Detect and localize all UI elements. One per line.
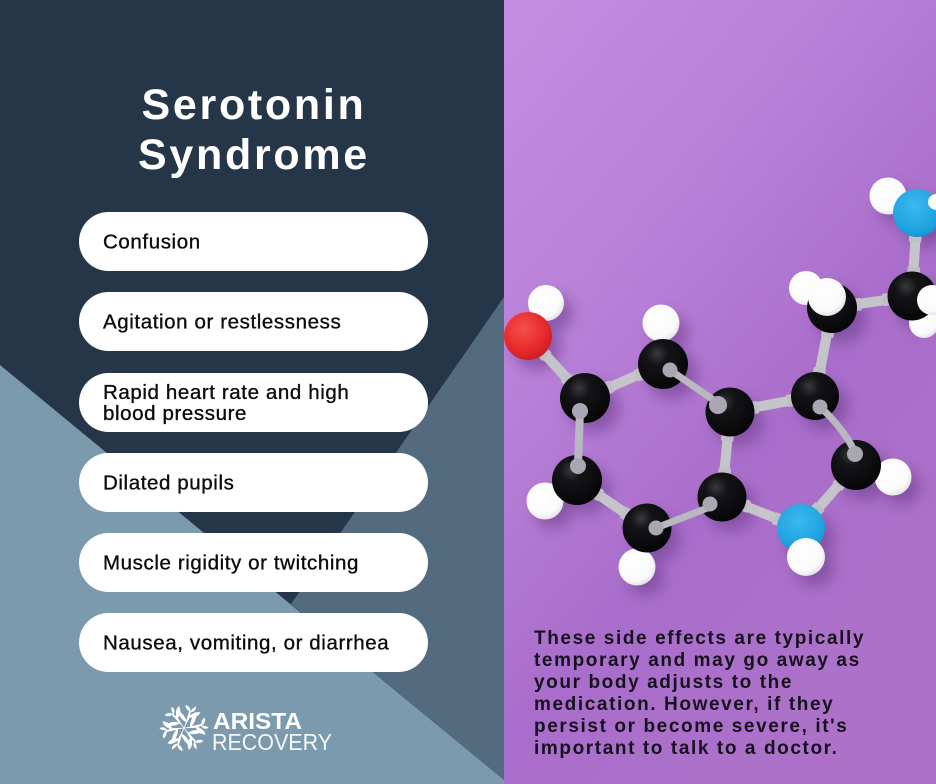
list item: Agitation or restlessness: Agitation or restlessness — [103, 310, 341, 334]
list item: Confusion — [79, 212, 428, 271]
list item: Rapid heart rate and high blood pressure: blood pressure — [103, 402, 247, 424]
list item: Nausea, vomiting, or diarrhea — [79, 613, 428, 672]
list item: Confusion: Confusion — [103, 230, 201, 254]
logo text: RECOVERY: RECOVERY — [212, 729, 332, 755]
text block: side effects note: These side effects are typically — [534, 628, 865, 649]
list item: Agitation or restlessness — [79, 292, 428, 351]
title: Serotonin — [142, 81, 366, 129]
text block: side effects note: your body adjusts to the — [534, 672, 793, 693]
list item: Muscle rigidity or twitching: Muscle rigidity or twitching — [103, 551, 359, 574]
title: Syndrome — [138, 131, 370, 179]
icon: leaf wreath — [156, 703, 212, 753]
molecule: single bonds — [528, 213, 917, 528]
list item: Rapid heart rate and high blood pressure: Rapid heart rate and high — [103, 380, 349, 404]
title — [138, 81, 370, 179]
text block: side effects note: medication. However, if they — [534, 694, 834, 715]
list item: Dilated pupils — [79, 452, 428, 512]
molecule: double bond rods — [570, 362, 863, 536]
text block: side effects note: important to talk to a doctor. — [534, 738, 839, 759]
text block: side effects note: temporary and may go away as — [534, 650, 861, 671]
molecule: atoms — [504, 178, 936, 586]
text block: side effects note: persist or become severe, it's — [534, 716, 848, 737]
list item: Muscle rigidity or twitching — [79, 532, 428, 592]
list item: Nausea, vomiting, or diarrhea: Nausea, vomiting, or diarrhea — [103, 632, 389, 654]
list item: Rapid heart rate and high blood pressure — [79, 372, 428, 432]
logo: Arista Recovery — [160, 705, 332, 755]
molecule shadow — [513, 188, 936, 595]
list item: Dilated pupils: Dilated pupils — [103, 471, 234, 494]
panel: left geometric background — [0, 297, 504, 784]
text block: side effects note — [534, 628, 865, 759]
logo text: ARISTA: ARISTA — [213, 708, 302, 734]
panel: purple photo background with molecule model — [504, 0, 936, 784]
